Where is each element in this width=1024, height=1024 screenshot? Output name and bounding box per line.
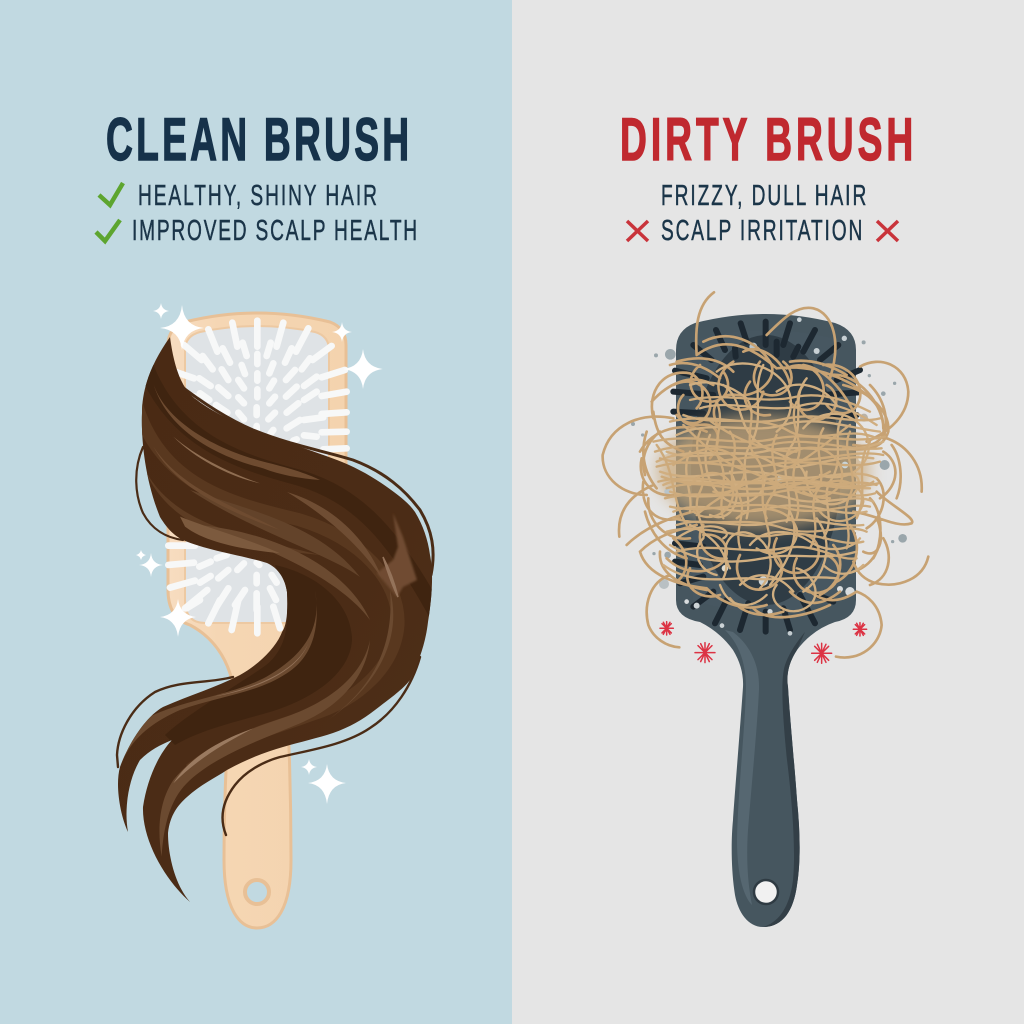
icon: red cross left [627, 221, 648, 241]
problem: scalp irritation: SCALP IRRITATION [661, 215, 862, 247]
illustration: tangled blond hair and dust [603, 292, 928, 658]
illustration: wooden paddle brush [168, 313, 347, 928]
hair highlights and shadows [120, 350, 440, 857]
dust specks [631, 317, 907, 636]
problem: frizzy, dull hair: FRIZZY, DULL HAIR [661, 180, 866, 212]
panel: clean brush [0, 0, 512, 1024]
illustration: flowing brown hair [117, 337, 440, 902]
bristles: white pins [168, 321, 347, 610]
bristles: black pins [673, 322, 860, 632]
heading: clean brush: CLEAN BRUSH [106, 106, 409, 173]
icon: red irritation asterisks [660, 622, 867, 663]
icon: red cross right [877, 221, 898, 241]
heading: dirty brush: DIRTY BRUSH [620, 106, 913, 173]
benefit: healthy, shiny hair: HEALTHY, SHINY HAIR [138, 180, 377, 212]
icon: green check 1 [99, 183, 123, 205]
icon: white sparkles [136, 303, 383, 804]
icon: green check 2 [96, 220, 120, 241]
panel: dirty brush [512, 0, 1024, 1024]
hair strands [603, 292, 928, 658]
benefit: improved scalp health: IMPROVED SCALP HEALTH [132, 215, 417, 247]
illustration: dark paddle brush [673, 314, 860, 927]
